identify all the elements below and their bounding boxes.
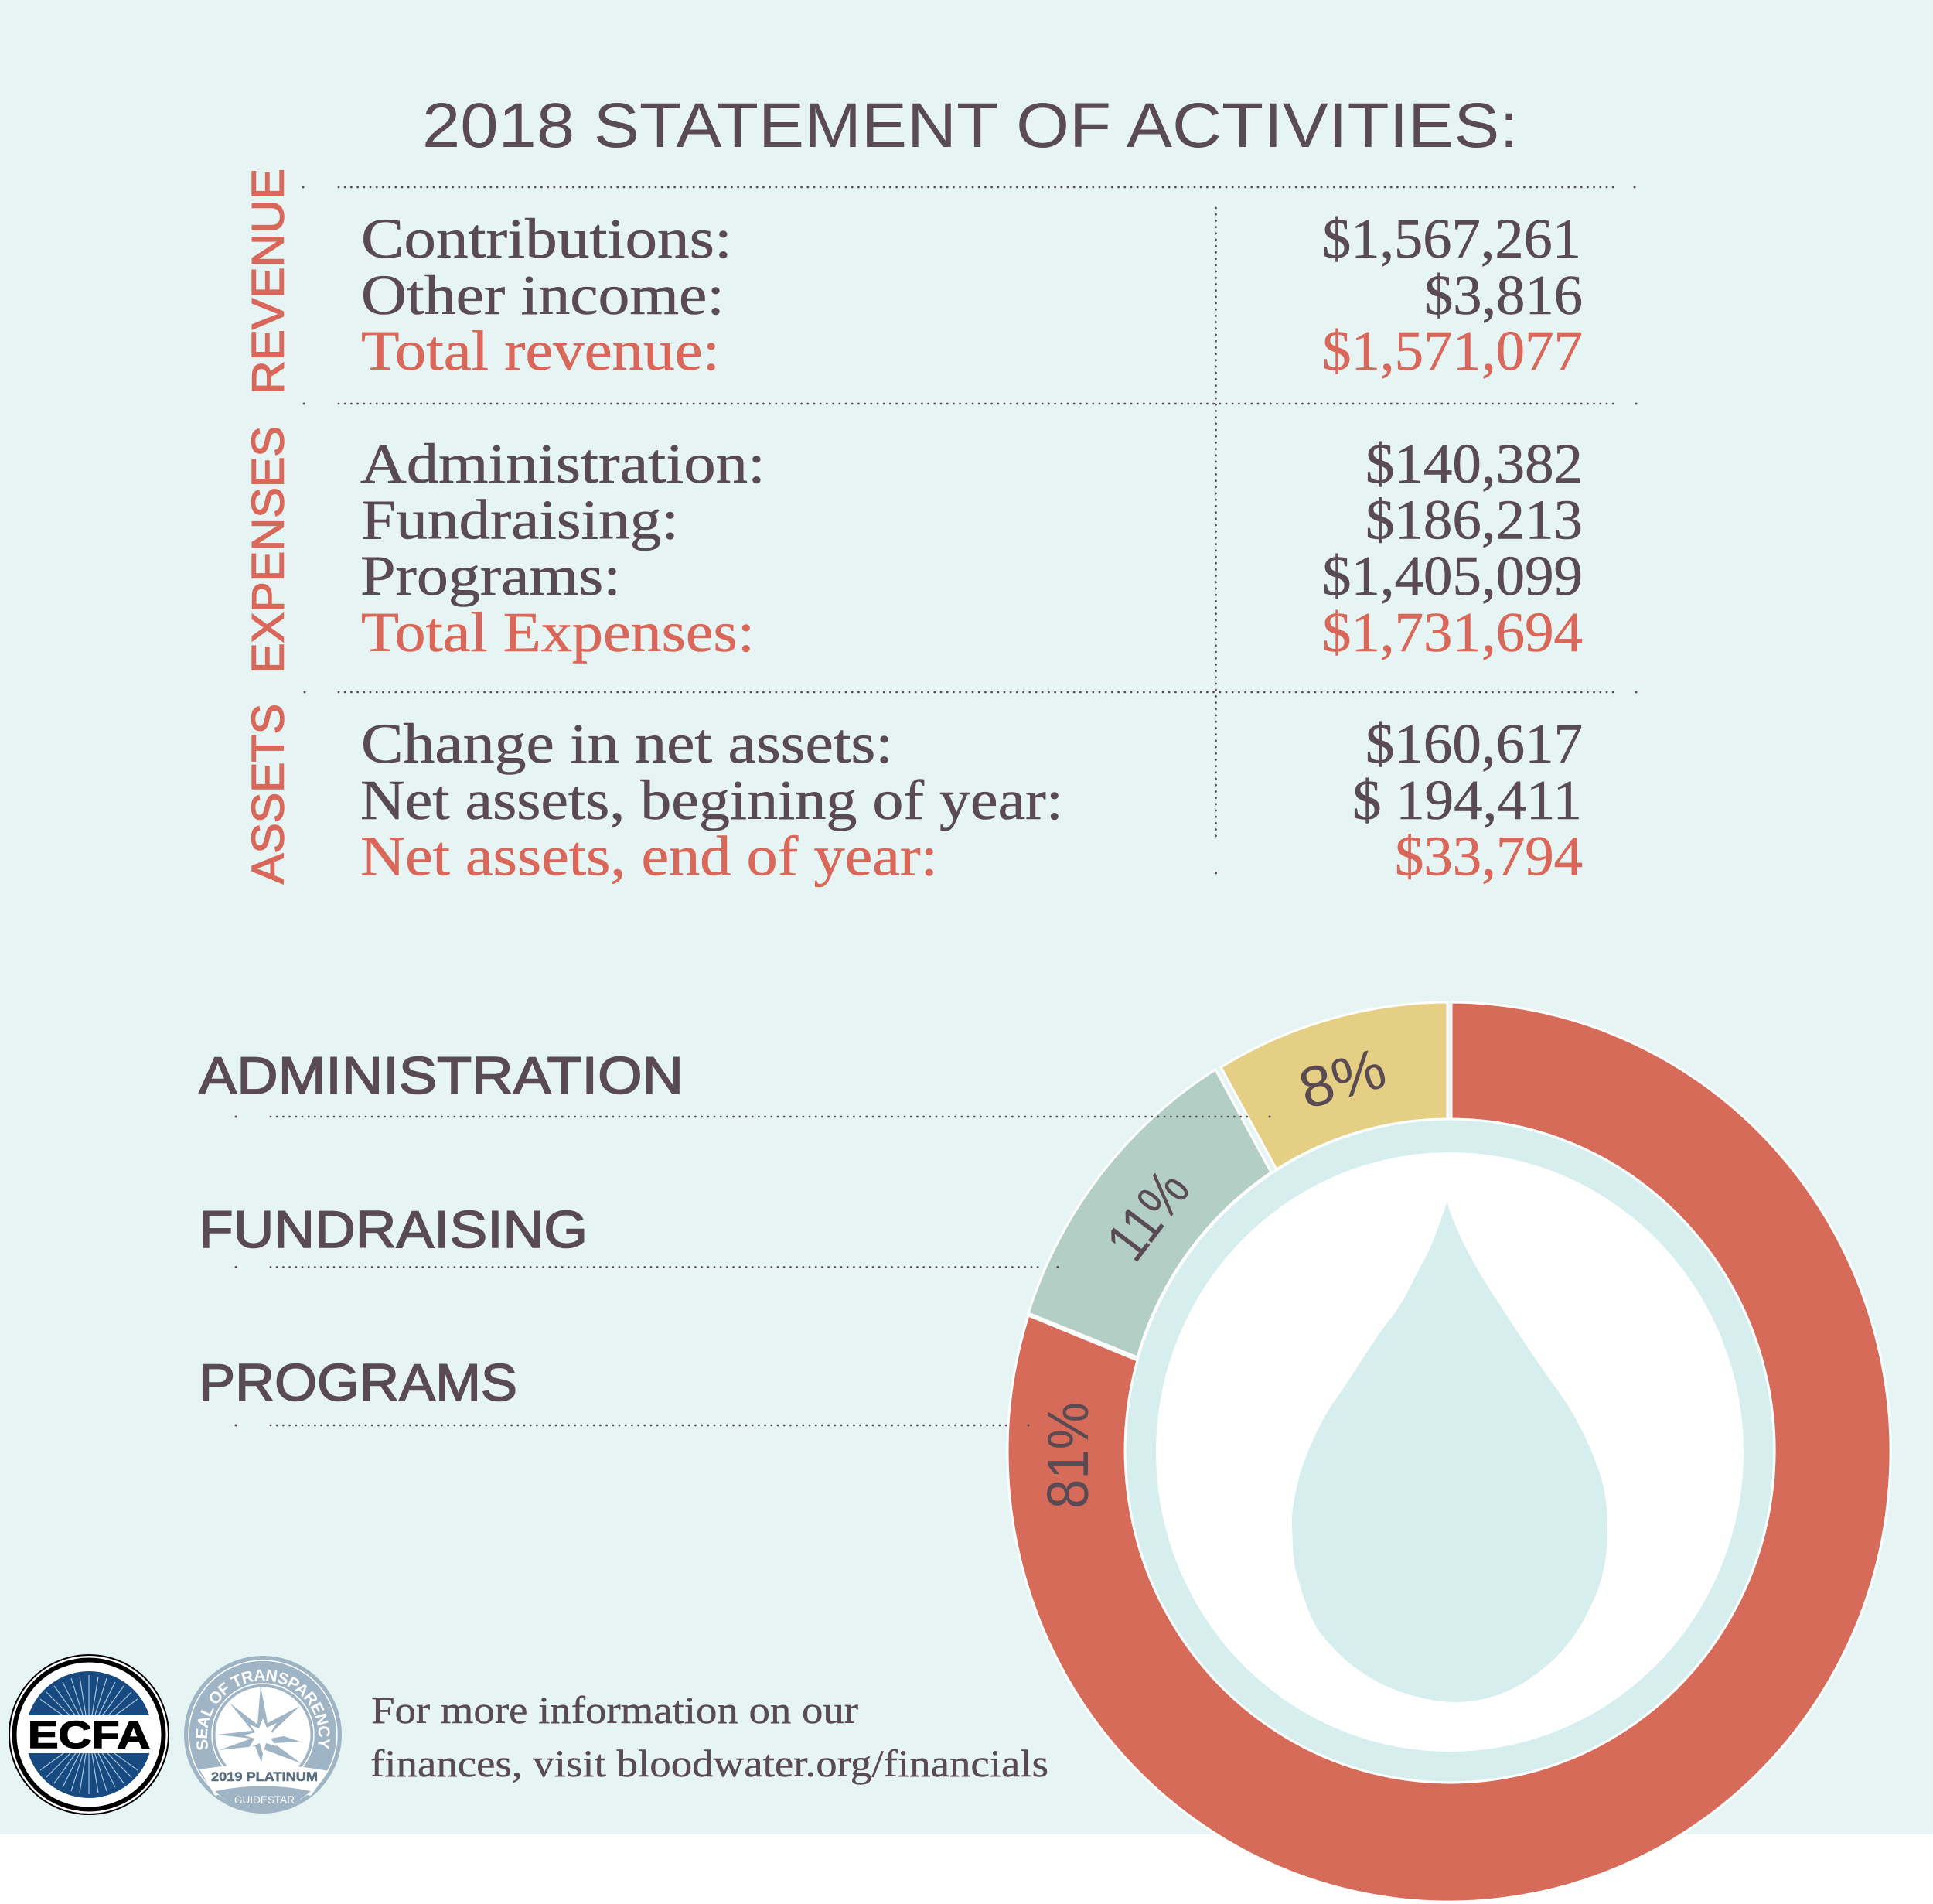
table: assets rows: $33,794 [1395,824,1583,888]
table: revenue rows: Contributions: [361,207,732,270]
legend label: administration: ADMINISTRATION [199,1046,684,1105]
badge: GuideStar seal of transparency [184,1656,342,1814]
table: revenue rows [361,207,1583,382]
label: 81%: 81% [1035,1402,1100,1509]
table: revenue rows: Other income: [361,264,724,326]
table: revenue rows: $1,571,077 [1322,319,1583,382]
table: expenses rows: $186,213 [1365,489,1583,551]
footer text: finances, visit bloodwater.org/financials [370,1742,1048,1785]
legend label: fundraising: FUNDRAISING [199,1200,588,1259]
table: expenses rows: $140,382 [1365,432,1583,495]
table: assets rows: Change in net assets: [361,712,893,775]
badge: ECFA [9,1655,169,1814]
segment: fundraising 11% [1028,1070,1271,1357]
section label: assets: ASSETS [243,704,294,884]
inner pale ring [1125,1119,1774,1783]
label: 11%: 11% [1094,1158,1202,1272]
table: assets rows: $160,617 [1365,712,1583,775]
seal ring text: SEAL OF TRANSPARENCY [196,1669,330,1749]
seal year text: 2019 PLATINUM [211,1769,318,1784]
segment: programs 81% [1007,1002,1890,1902]
section label: revenue: REVENUE [243,169,294,394]
table: expenses rows: Administration: [360,432,765,495]
table: expenses rows: Fundraising: [361,489,679,551]
table: revenue rows: Total revenue: [361,319,720,382]
section label: expenses: EXPENSES [243,426,294,674]
table: revenue rows: $3,816 [1424,264,1583,326]
table: expenses rows [360,432,1583,664]
seal guidestar text: GUIDESTAR [234,1794,295,1806]
label: 8%: 8% [1292,1036,1393,1121]
legend label: programs: PROGRAMS [199,1353,517,1412]
table: assets rows: $ 194,411 [1352,769,1582,831]
icon: water drop [1292,1202,1607,1702]
table: revenue rows: $1,567,261 [1322,207,1581,270]
segment: administration 8% [1221,1002,1447,1169]
footer text: For more information on our [371,1688,858,1732]
white centre disc [1156,1152,1744,1752]
table: expenses rows: $1,405,099 [1322,544,1583,607]
badge text: ECFA [28,1715,150,1756]
table: assets rows: Net assets, end of year: [360,824,938,888]
table: expenses rows: $1,731,694 [1322,601,1583,664]
table: assets rows [360,712,1583,888]
footer text [370,1688,1048,1785]
donut chart [1007,1002,1890,1902]
table: expenses rows: Programs: [360,544,621,607]
table: assets rows: Net assets, begining of year: [360,769,1063,831]
table: expenses rows: Total Expenses: [361,601,755,664]
title: 2018 STATEMENT OF ACTIVITIES: [422,90,1519,161]
